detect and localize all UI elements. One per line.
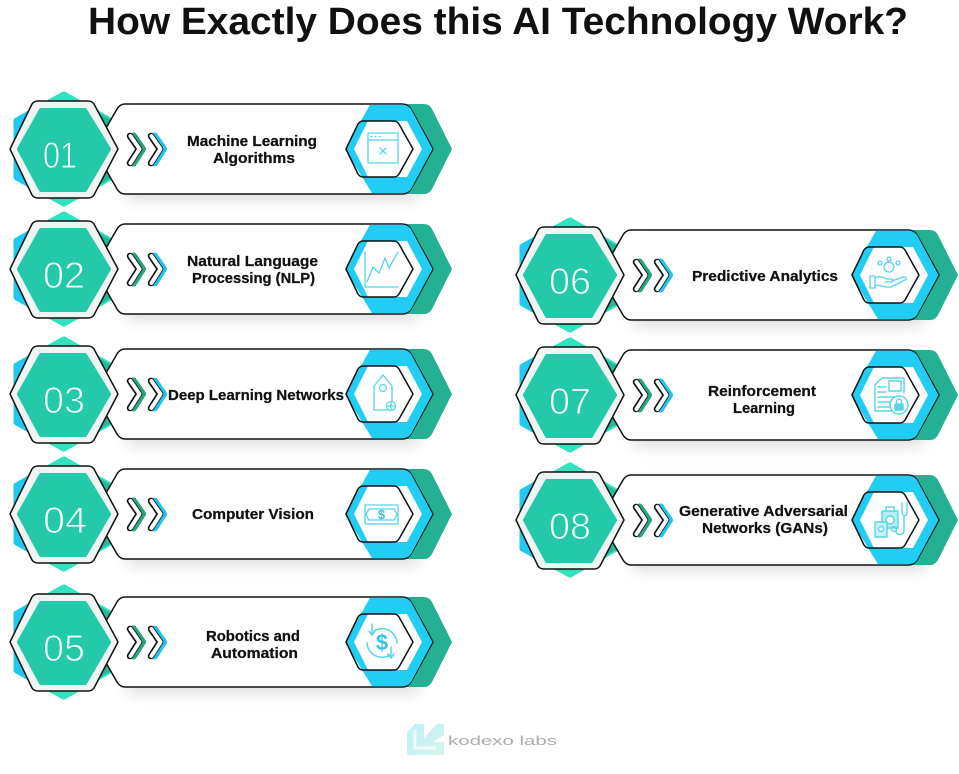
label: Machine Learning Algorithms: Algorithms xyxy=(213,151,295,167)
label: Reinforcement Learning: Reinforcement xyxy=(708,384,816,400)
number 01: 01 xyxy=(43,135,77,176)
number 03: 03 xyxy=(43,380,85,421)
label: Computer Vision: Computer Vision xyxy=(192,507,314,523)
icon: tag with plus xyxy=(374,375,396,410)
label: Reinforcement Learning xyxy=(708,384,816,417)
label: Robotics and Automation xyxy=(206,629,300,662)
panel: step 03 Deep Learning Networks xyxy=(10,340,452,448)
icon: dollar cycle: $ xyxy=(376,630,388,655)
panel: step 06 Predictive Analytics xyxy=(516,221,958,329)
label: Generative Adversarial Networks (GANs): Networks (GANs) xyxy=(702,521,828,537)
label: Reinforcement Learning: Learning xyxy=(733,401,795,417)
logo: kodexo labs xyxy=(407,724,558,755)
label: Natural Language Processing (NLP): Natural Language xyxy=(187,254,318,270)
icon: dollar cycle xyxy=(367,624,397,658)
label: Deep Learning Networks: Deep Learning Networks xyxy=(168,388,344,404)
title: How Exactly Does this AI Technology Work? xyxy=(88,1,908,43)
icon: document with lock xyxy=(875,378,908,414)
label: Machine Learning Algorithms xyxy=(187,134,317,167)
panel: step 02 Natural Language Processing xyxy=(10,215,452,323)
number 05: 05 xyxy=(43,628,85,669)
icon: medical kit and stethoscope xyxy=(875,503,907,537)
panel: step 01 Machine Learning Algorithms xyxy=(10,95,452,203)
panel: step 07 Reinforcement Learning xyxy=(516,341,958,449)
icon: line chart xyxy=(365,252,398,287)
icon: hand with people xyxy=(870,257,906,288)
label: Natural Language Processing (NLP): Processing (NLP) xyxy=(192,271,315,287)
label: Natural Language Processing (NLP) xyxy=(187,254,318,287)
number 07: 07 xyxy=(549,381,591,422)
panel: step 05 Robotics and Automation xyxy=(10,588,452,696)
number 06: 06 xyxy=(549,261,591,302)
number 08: 08 xyxy=(549,506,591,547)
number 04: 04 xyxy=(43,500,87,541)
panel: step 04 Computer Vision xyxy=(10,460,452,568)
label: Machine Learning Algorithms: Machine Learning xyxy=(187,134,317,150)
logo: kodexo labs: kodexo labs xyxy=(448,733,558,748)
icon: banknote: $ xyxy=(378,507,386,522)
panel: step 08 Generative Adversarial Networks xyxy=(516,466,958,574)
label: Generative Adversarial Networks (GANs): Generative Adversarial xyxy=(679,504,848,520)
label: Generative Adversarial Networks (GANs) xyxy=(679,504,848,537)
label: Robotics and Automation: Automation xyxy=(211,646,298,662)
label: Robotics and Automation: Robotics and xyxy=(206,629,300,645)
number 02: 02 xyxy=(43,255,85,296)
label: Predictive Analytics: Predictive Analytics xyxy=(692,269,838,285)
icon: banknote xyxy=(365,505,398,524)
icon: browser window xyxy=(368,133,398,163)
